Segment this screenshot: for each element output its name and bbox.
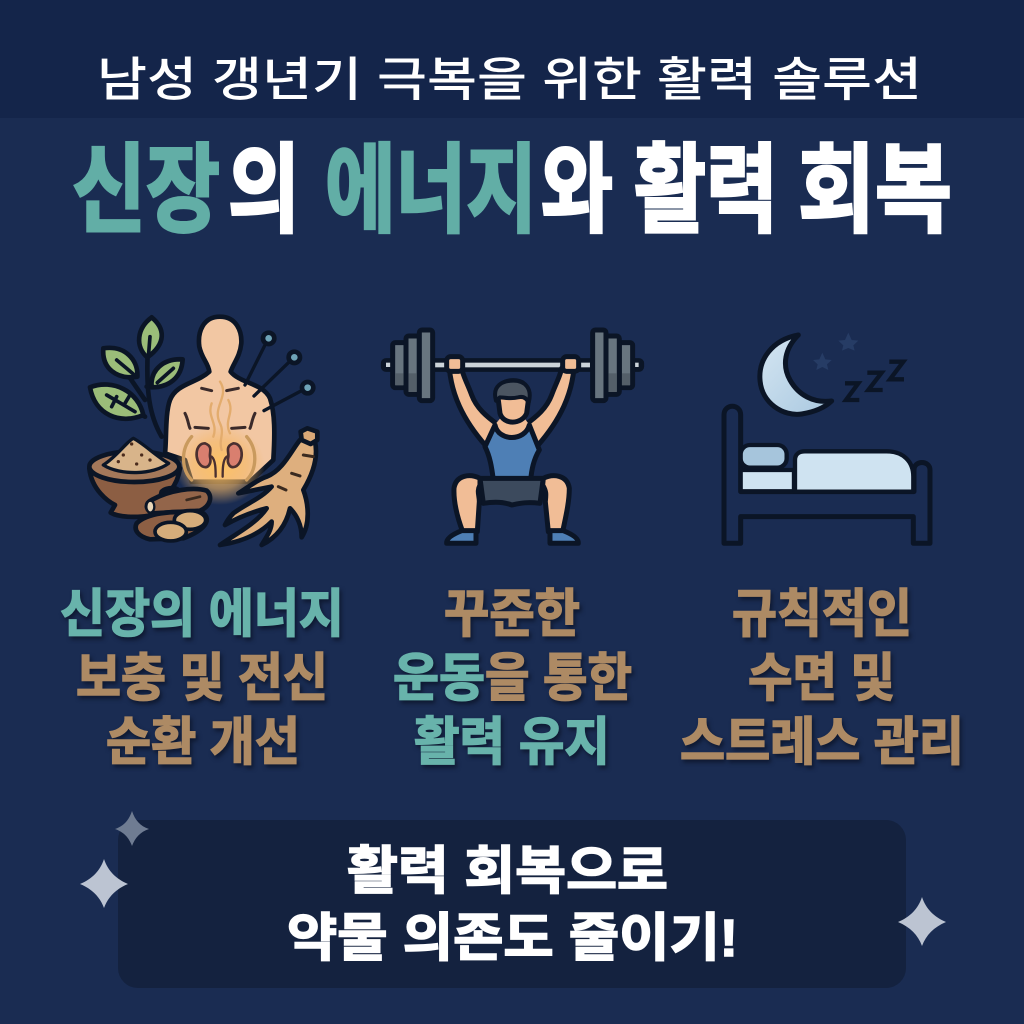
head bbox=[498, 381, 529, 422]
shorts bbox=[480, 478, 543, 505]
icon: herbs, body, kidneys and ginseng bbox=[89, 317, 317, 545]
label: column 2: 활력 유지 bbox=[414, 714, 610, 772]
label: column 3 bbox=[680, 586, 964, 772]
main title: 에너지 bbox=[325, 136, 537, 245]
callout text: 약물 의존도 줄이기! bbox=[287, 910, 738, 968]
needles bbox=[245, 338, 307, 411]
tank top bbox=[485, 425, 539, 480]
main title bbox=[72, 136, 952, 245]
chest marks bbox=[185, 388, 255, 428]
legs bbox=[454, 476, 480, 532]
label: column 1: 신장의 에너지 bbox=[60, 586, 344, 644]
label: column 3: 규칙적인 bbox=[732, 586, 912, 644]
stars bbox=[838, 333, 858, 351]
main title: 회복 bbox=[798, 136, 952, 245]
branch bbox=[107, 340, 167, 437]
blanket bbox=[795, 451, 913, 492]
mattress bbox=[741, 470, 794, 491]
callout box bbox=[118, 820, 906, 988]
leaves bbox=[139, 317, 162, 357]
header band bbox=[0, 0, 1024, 118]
label: column 3: 스트레스 관리 bbox=[680, 714, 964, 772]
subtitle: 남성 갱년기 극복을 위한 활력 솔루션 bbox=[97, 53, 922, 106]
shoes bbox=[447, 531, 476, 543]
icon: sparkle left bbox=[80, 859, 128, 908]
kidneys bbox=[197, 443, 210, 467]
arms bbox=[449, 368, 498, 446]
label: column 1: 순환 개선 bbox=[106, 714, 300, 772]
icon: sparkle small bbox=[115, 811, 149, 846]
bed frame bbox=[724, 406, 930, 543]
ginseng bbox=[220, 440, 316, 545]
bowl bbox=[89, 468, 180, 517]
label: column 2: 을 통한 bbox=[485, 650, 632, 708]
hands bbox=[447, 357, 463, 371]
label: column 2 bbox=[393, 586, 632, 772]
icon: moon and bed bbox=[724, 333, 930, 543]
main title: 활력 bbox=[634, 136, 778, 245]
label: column 1 bbox=[60, 586, 344, 772]
label: column 2: 운동 bbox=[393, 650, 485, 708]
label: column 1: 보충 및 전신 bbox=[76, 650, 328, 708]
moon bbox=[760, 335, 832, 414]
main title: 신장 bbox=[72, 136, 220, 245]
callout text bbox=[287, 843, 738, 968]
zzz bbox=[845, 362, 904, 400]
label: column 3: 수면 및 bbox=[748, 650, 895, 708]
barbell bbox=[383, 361, 642, 369]
ginseng root pieces and slices bbox=[160, 488, 180, 500]
label: column 2: 꾸준한 bbox=[444, 586, 580, 644]
neck bbox=[493, 417, 531, 437]
icon: weightlifter bbox=[383, 330, 642, 543]
body bbox=[165, 317, 274, 482]
main title: 와 bbox=[541, 136, 613, 245]
pillow bbox=[741, 445, 787, 468]
icon: sparkle right bbox=[898, 897, 946, 946]
glow bbox=[175, 425, 265, 505]
callout text: 활력 회복으로 bbox=[347, 843, 668, 901]
energy waves bbox=[210, 382, 230, 450]
main title: 의 bbox=[228, 136, 300, 245]
